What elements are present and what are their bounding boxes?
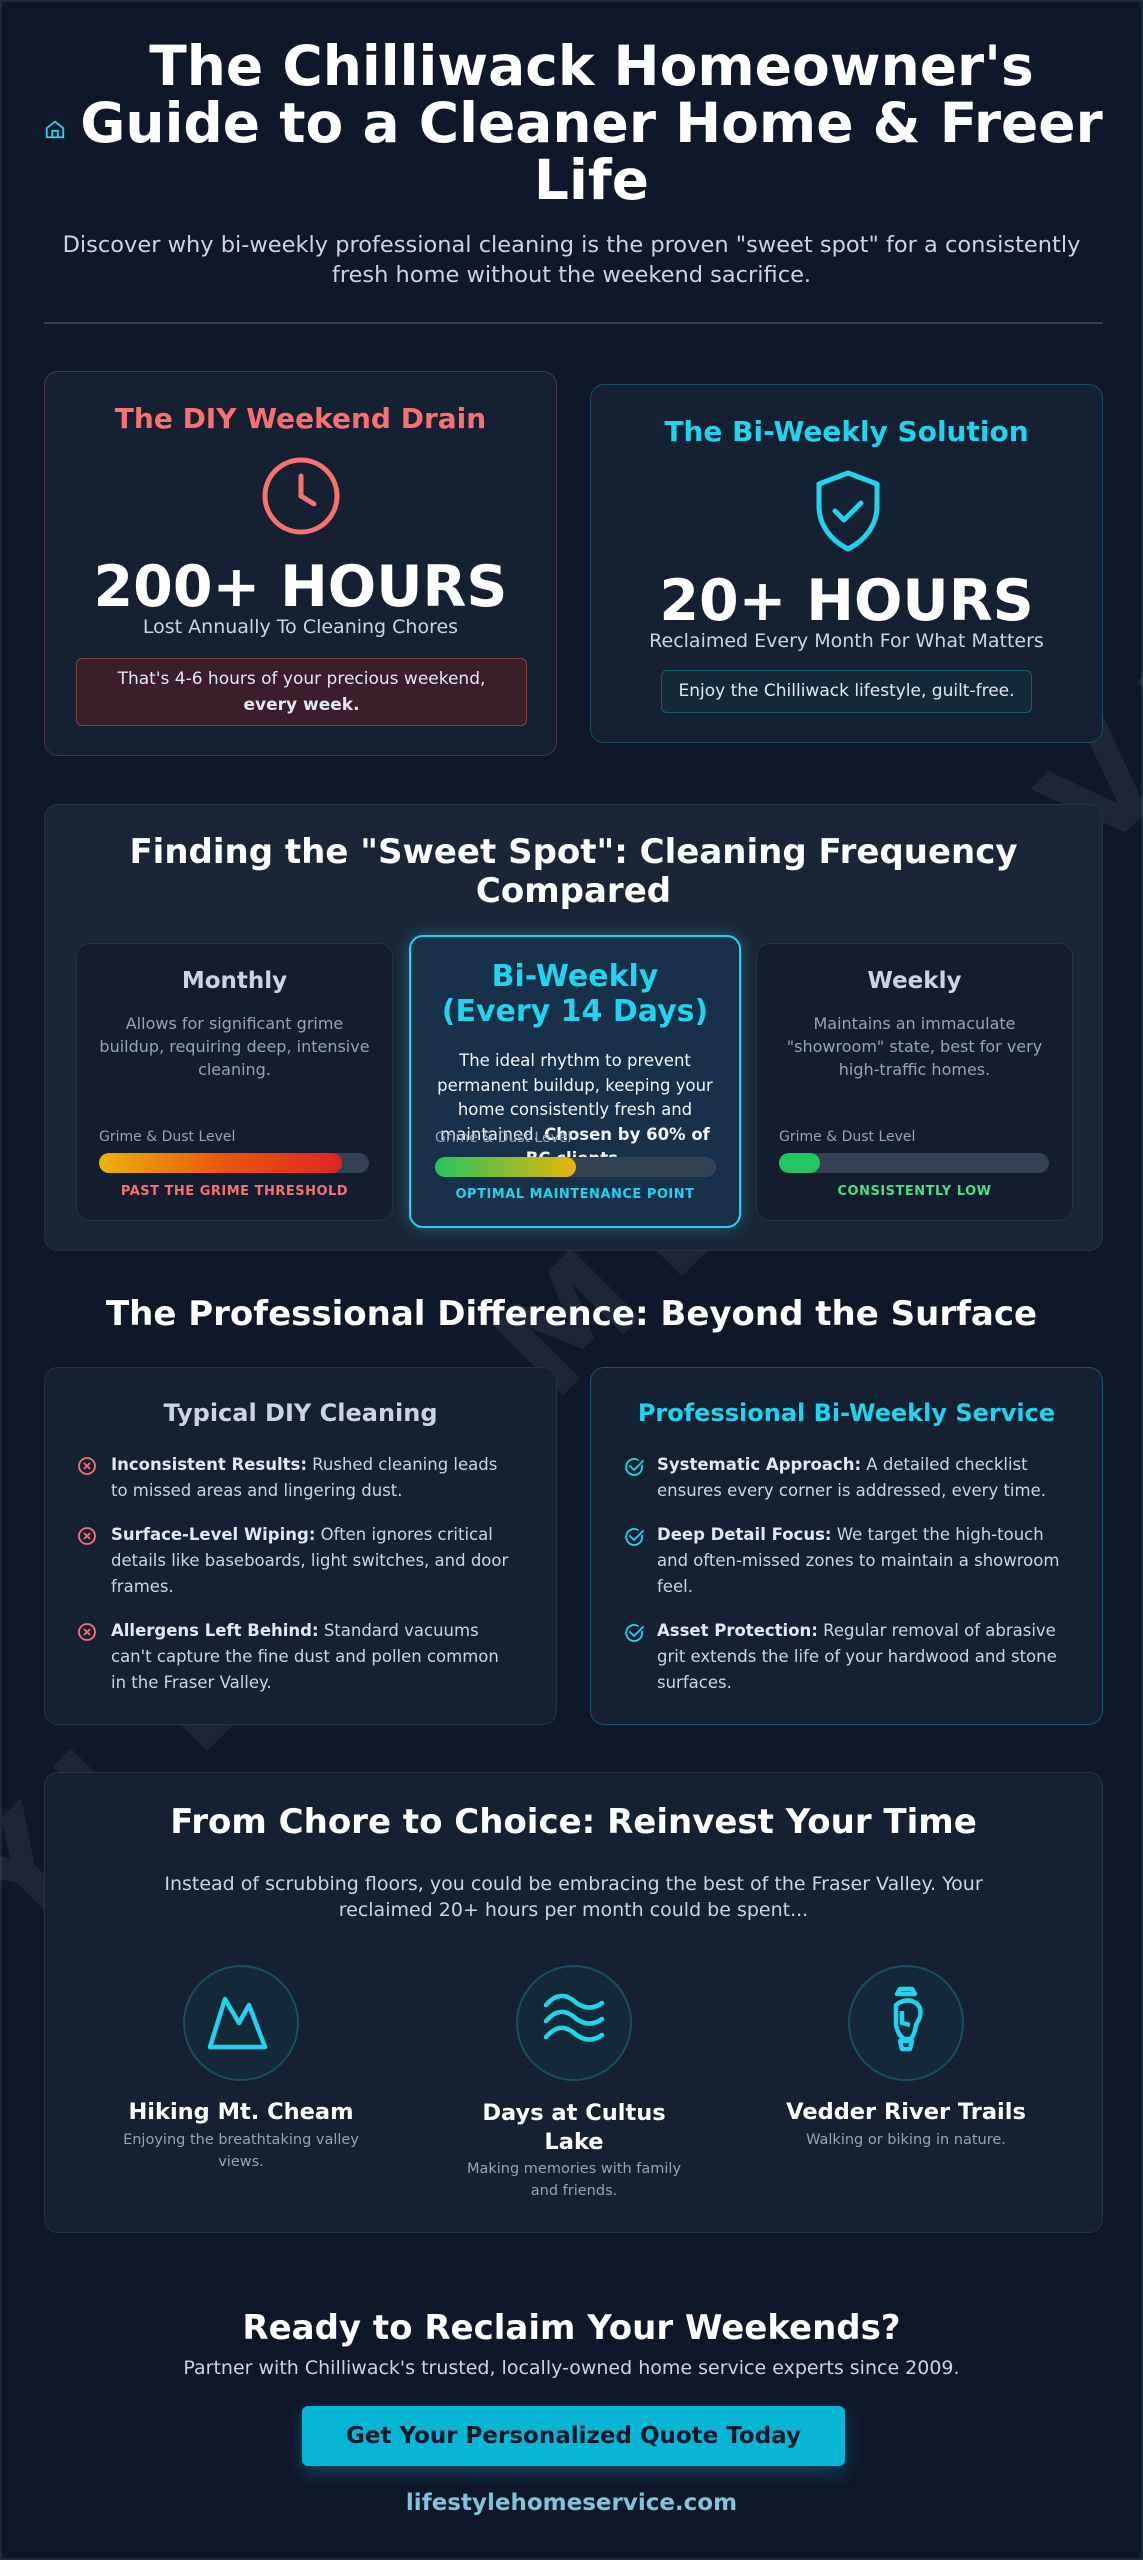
callout: [76, 658, 527, 726]
website link: lifestylehomeservice.com: [406, 2490, 737, 2516]
item: hiking: [123, 1965, 359, 2170]
icon: house: [46, 120, 64, 138]
bar: monthly: [99, 1153, 369, 1173]
panel: typical DIY cleaning: Surface-Level Wiping: Often ignores critical details like baseboards, light switches, and door frames.: [111, 1525, 508, 1596]
stat: 20+ HOURS: [659, 568, 1034, 634]
card: bi-weekly: Grime & Dust Level: [435, 1130, 571, 1146]
card: monthly: [76, 943, 393, 1221]
card: bi-weekly: [409, 935, 741, 1228]
card: weekly: Grime & Dust Level: [779, 1129, 915, 1145]
card: bi-weekly: (Every 14 Days): [442, 994, 708, 1029]
title: The Chilliwack Homeowner's: [149, 34, 1034, 98]
callout: [661, 670, 1032, 713]
title: Guide to a Cleaner Home & Freer: [80, 91, 1103, 155]
bar: bi-weekly: [435, 1157, 716, 1177]
item: hiking: Enjoying the breathtaking valley views.: [123, 2132, 359, 2170]
CTA heading: Ready to Reclaim Your Weekends?: [242, 2308, 901, 2348]
card: monthly: Grime & Dust Level: [99, 1129, 235, 1145]
heading: The DIY Weekend Drain: [115, 402, 486, 435]
item: vedder river trails: [786, 1965, 1026, 2148]
CTA subtext: Partner with Chilliwack's trusted, locally-owned home service experts since 2009.: [183, 2357, 960, 2379]
card: bi-weekly: Bi-Weekly: [492, 959, 658, 994]
bar: weekly: [779, 1153, 1049, 1173]
card: monthly: Allows for significant grime buildup, requiring deep, intensive cleaning.: [99, 1014, 370, 1079]
button: [302, 2406, 845, 2466]
callout: That's 4-6 hours of your precious weekend,: [118, 669, 485, 689]
callout: Enjoy the Chilliwack lifestyle, guilt-free.: [678, 681, 1015, 701]
subtitle: fresh home without the weekend sacrifice.: [332, 262, 811, 288]
heading: [129, 832, 1018, 911]
panel: typical DIY cleaning: Allergens Left Behind: Standard vacuums can't capture the fine dust and pollen common in the Fraser Valley.: [111, 1621, 499, 1692]
panel: typical DIY cleaning: Inconsistent Results: Rushed cleaning leads to missed areas and lingering dust.: [111, 1455, 497, 1500]
title: [80, 34, 1103, 212]
card: weekly: CONSISTENTLY LOW: [838, 1184, 991, 1199]
panel: professional bi-weekly service: [590, 1367, 1103, 1725]
heading: professional difference: The Professional Difference: Beyond the Surface: [106, 1294, 1037, 1334]
stat caption: Reclaimed Every Month For What Matters: [649, 630, 1044, 652]
panel: bi-weekly solution: [590, 384, 1103, 743]
panel: professional bi-weekly service: Professional Bi-Weekly Service: [638, 1399, 1055, 1427]
card: weekly: [756, 943, 1073, 1221]
icon: shield: [816, 470, 880, 552]
panel: DIY weekend drain: [44, 371, 557, 756]
panel: typical DIY cleaning: [44, 1367, 557, 1725]
item: cultus lake: [467, 1965, 681, 2199]
item: cultus lake: Making memories with family and friends.: [467, 2161, 681, 2199]
panel: professional bi-weekly service: Deep Detail Focus: We target the high-touch and often-missed zones to maintain a showroom feel.: [657, 1525, 1059, 1596]
card: weekly: Maintains an immaculate "showroom" state, best for very high-traffic homes.: [787, 1014, 1042, 1079]
heading: The Bi-Weekly Solution: [664, 415, 1029, 448]
panel: professional bi-weekly service: Systematic Approach: A detailed checklist ensures every corner is addressed, every time.: [657, 1455, 1046, 1500]
item: hiking: Hiking Mt. Cheam: [128, 2099, 354, 2125]
card: monthly: Monthly: [182, 968, 287, 994]
item: vedder river trails: Vedder River Trails: [786, 2099, 1026, 2125]
title: Life: [534, 148, 649, 212]
panel: reinvest your time: [44, 1772, 1103, 2233]
button: Get Your Personalized Quote Today: [346, 2423, 801, 2449]
card: monthly: PAST THE GRIME THRESHOLD: [121, 1184, 348, 1199]
panel: professional bi-weekly service: Asset Protection: Regular removal of abrasive grit extends the life of your hardwood and stone surfaces.: [657, 1621, 1057, 1692]
stat: 200+ HOURS: [94, 554, 507, 620]
panel: cleaning frequency compared: [44, 804, 1103, 1251]
heading: Compared: [476, 871, 671, 911]
callout: every week.: [243, 695, 360, 715]
card: bi-weekly: The ideal rhythm to prevent permanent buildup, keeping your home consistently fresh and maintained. Chosen by 60% of BC clients.: [437, 1051, 713, 1168]
heading: Finding the "Sweet Spot": Cleaning Frequency: [129, 832, 1018, 872]
subtitle: [63, 232, 1080, 288]
icon: clock: [262, 458, 340, 534]
card: bi-weekly: OPTIMAL MAINTENANCE POINT: [456, 1187, 694, 1202]
card: weekly: Weekly: [868, 968, 961, 994]
panel: reinvest your time: Instead of scrubbing floors, you could be embracing the best of the Fraser Valley. Your reclaimed 20+ hours per month could be spent...: [164, 1873, 983, 1921]
panel: reinvest your time: From Chore to Choice: Reinvest Your Time: [170, 1802, 977, 1842]
stat caption: Lost Annually To Cleaning Chores: [143, 616, 458, 638]
panel: typical DIY cleaning: Typical DIY Cleaning: [163, 1399, 438, 1427]
item: vedder river trails: Walking or biking in nature.: [806, 2132, 1006, 2148]
item: cultus lake: Days at Cultus Lake: [482, 2100, 666, 2155]
subtitle: Discover why bi-weekly professional cleaning is the proven "sweet spot" for a consistently: [63, 232, 1080, 258]
